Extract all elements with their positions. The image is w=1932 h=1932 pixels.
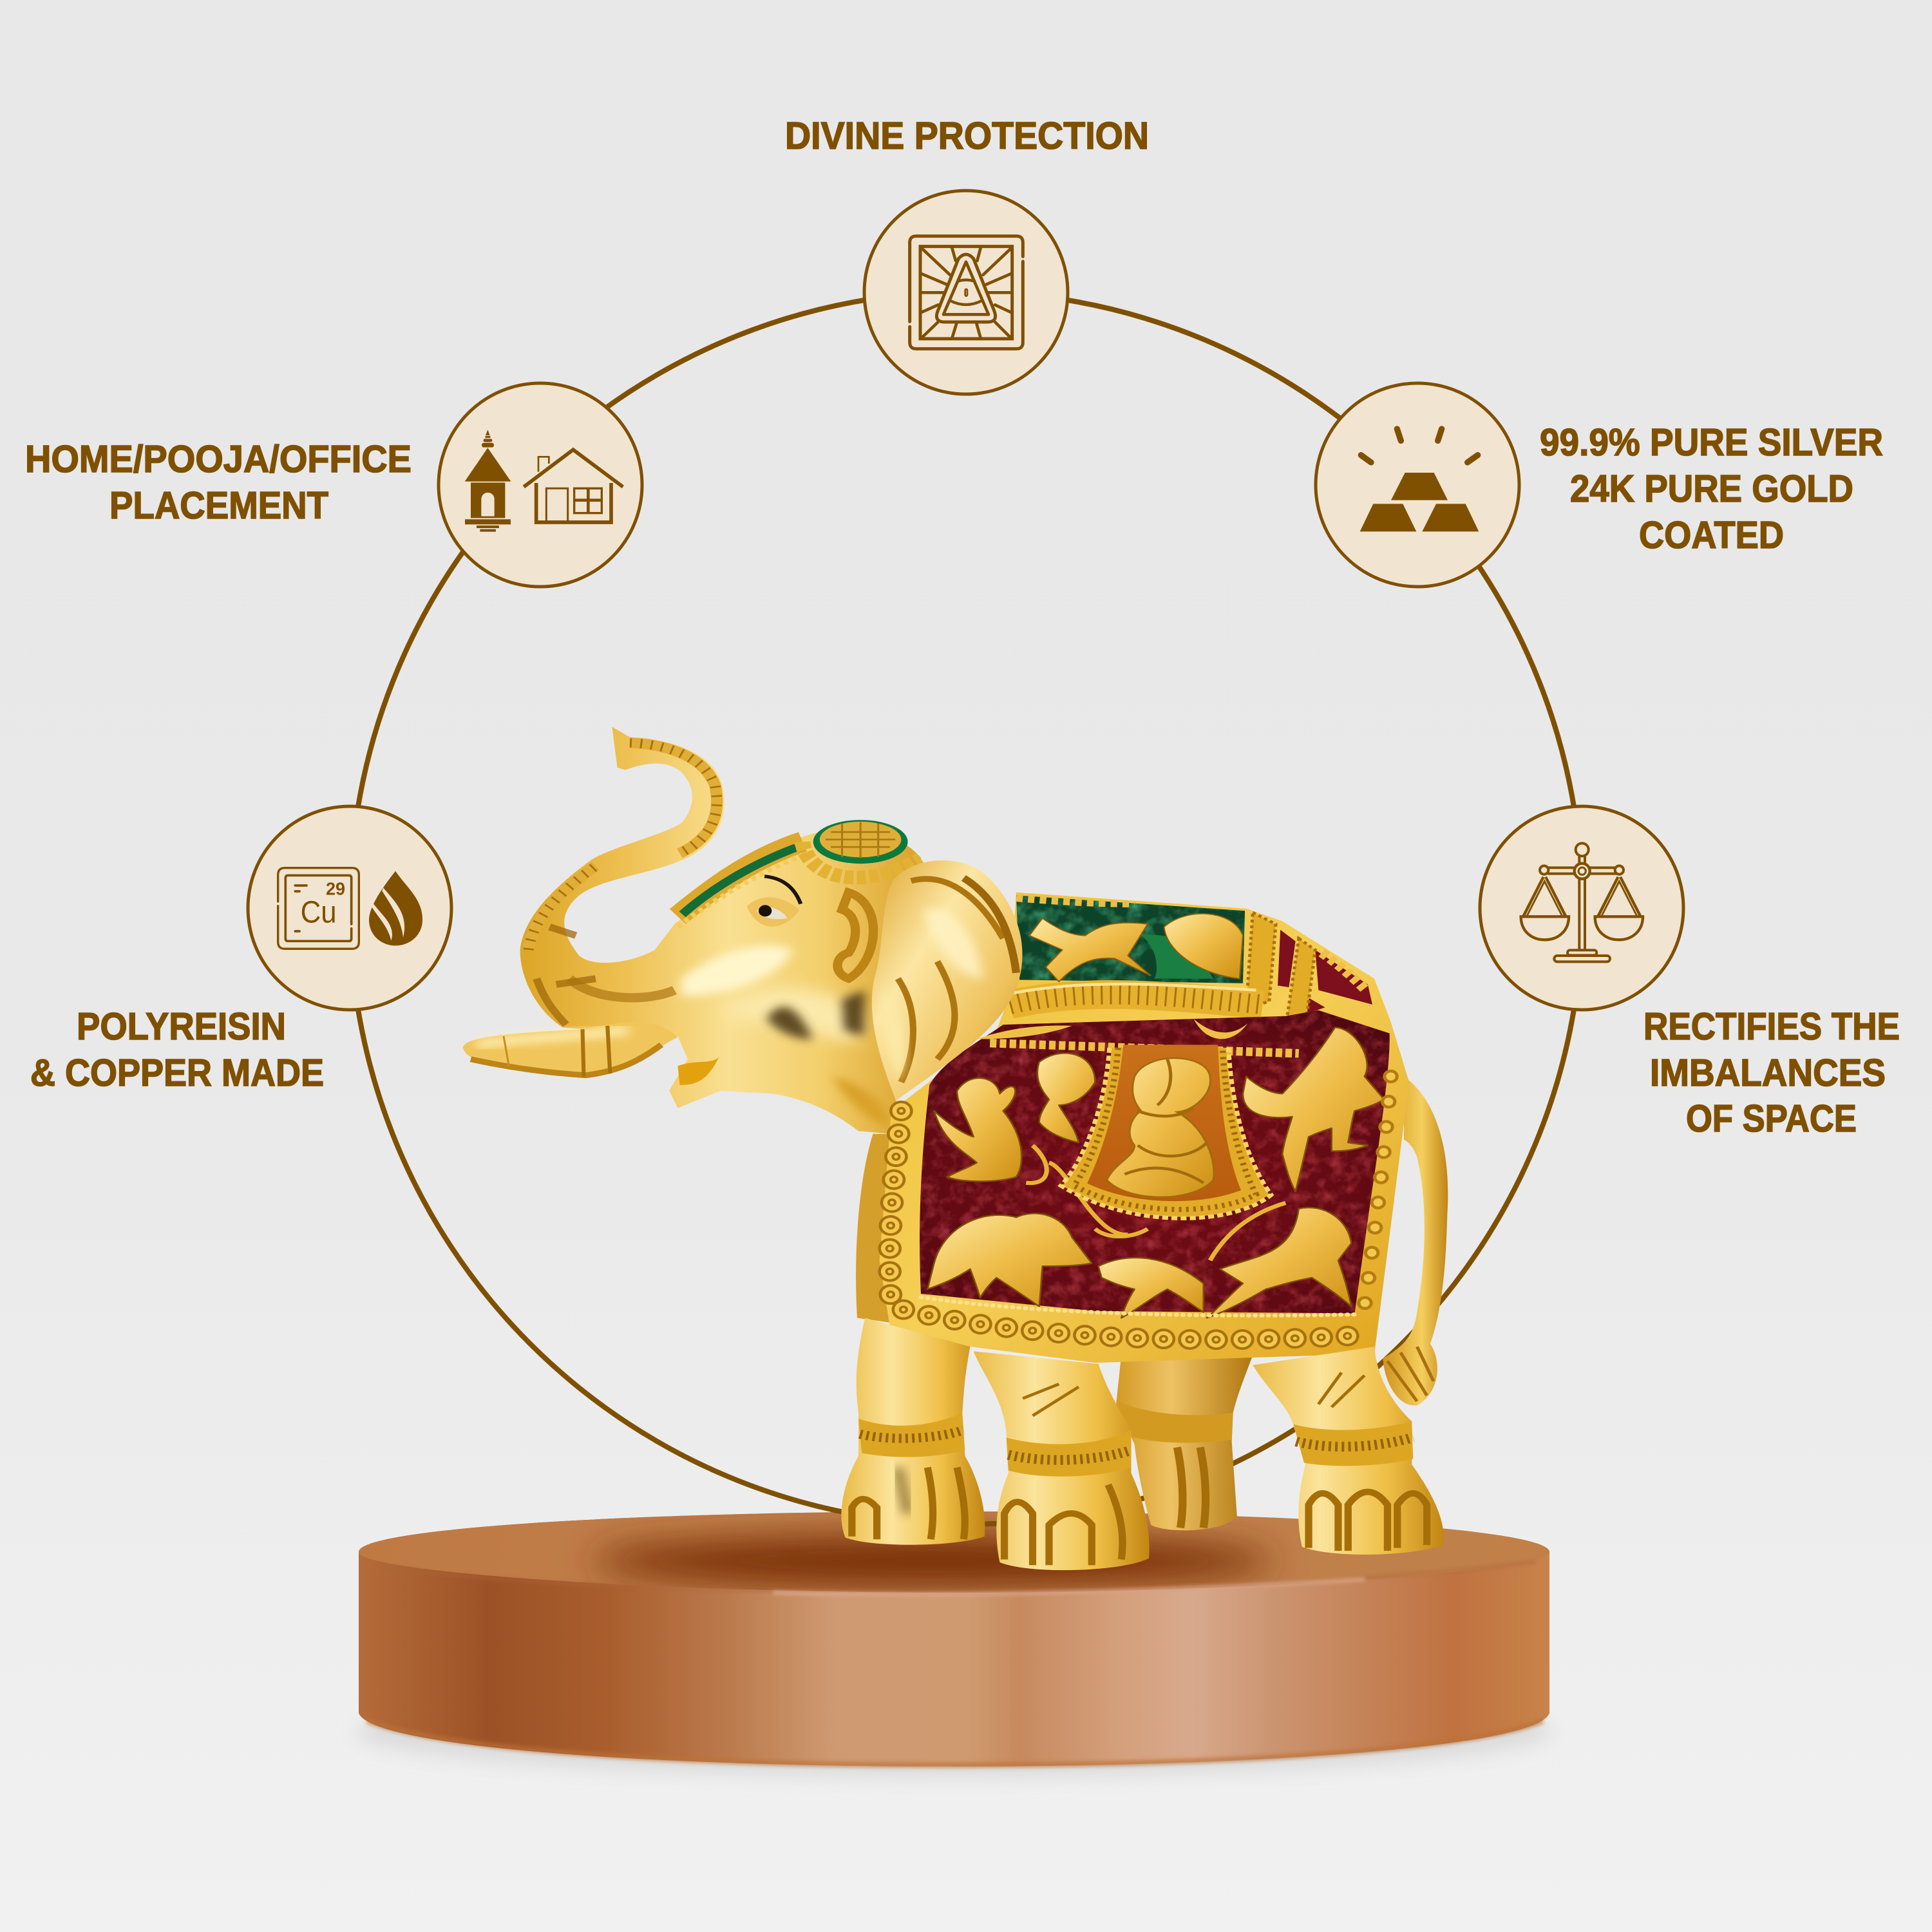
blanket: green top panel (1016, 895, 1245, 983)
label: home pooja office placement: HOME/POOJA/OFFICE (25, 437, 412, 480)
label: rectifies imbalances of space: IMBALANCES (1650, 1051, 1886, 1094)
label: pure silver and gold coating (1540, 421, 1883, 556)
tusk (463, 1022, 677, 1077)
heading: divine protection: DIVINE PROTECTION (785, 114, 1149, 157)
chest (856, 1134, 904, 1323)
icon badge: divine protection, eye in pyramid (864, 191, 1068, 394)
label: polyresin and copper (30, 1005, 324, 1094)
blanket: beaded scalloped medallions (890, 1076, 1391, 1340)
rear leg (1253, 1347, 1444, 1555)
label: rectifies imbalances of space: OF SPACE (1686, 1097, 1857, 1140)
label: home pooja office placement (25, 437, 412, 527)
label: pure silver and gold coating: 99.9% PURE SILVER (1540, 421, 1883, 464)
central orange panel (1061, 1045, 1271, 1218)
label: home pooja office placement: PLACEMENT (109, 484, 328, 527)
far legs (1116, 1356, 1253, 1530)
label: rectifies imbalances of space: RECTIFIES THE (1643, 1005, 1900, 1048)
label: pure silver and gold coating: 24K PURE GOLD (1570, 467, 1853, 510)
icon badge: temple and house (439, 383, 642, 587)
icon badge: balance scales (1480, 806, 1683, 1010)
blanket: rear shoulder panels (1246, 913, 1372, 1028)
label: polyresin and copper: & COPPER MADE (30, 1051, 324, 1094)
label: pure silver and gold coating: COATED (1639, 513, 1784, 556)
label: rectifies imbalances of space (1643, 1005, 1900, 1140)
headband and crown (677, 820, 921, 927)
icon badge: shining gold bars (1316, 383, 1519, 587)
ear (872, 860, 1023, 1101)
elephant statue (463, 727, 1448, 1570)
tail (1383, 1076, 1448, 1405)
blanket: red main panel (920, 1010, 1390, 1313)
eye and temple curl (747, 876, 873, 979)
Ganesha figure (1107, 1058, 1214, 1197)
front leg one (841, 1318, 985, 1545)
platform: copper pedestal (355, 1511, 1553, 1777)
blanket: gold braid under green panel (1010, 984, 1263, 1005)
icon badge: copper element and drop (248, 806, 451, 1010)
ring connecting the icons (350, 292, 1582, 1524)
icon badge: copper element and drop: Cu (301, 895, 337, 930)
animal carvings (927, 1028, 1384, 1318)
front leg two (974, 1351, 1150, 1570)
label: polyresin and copper: POLYREISIN (77, 1005, 286, 1048)
head and trunk (520, 727, 938, 1134)
blanket: gold outer border (880, 893, 1409, 1363)
icon badge: copper element and drop: 29 (326, 878, 345, 898)
